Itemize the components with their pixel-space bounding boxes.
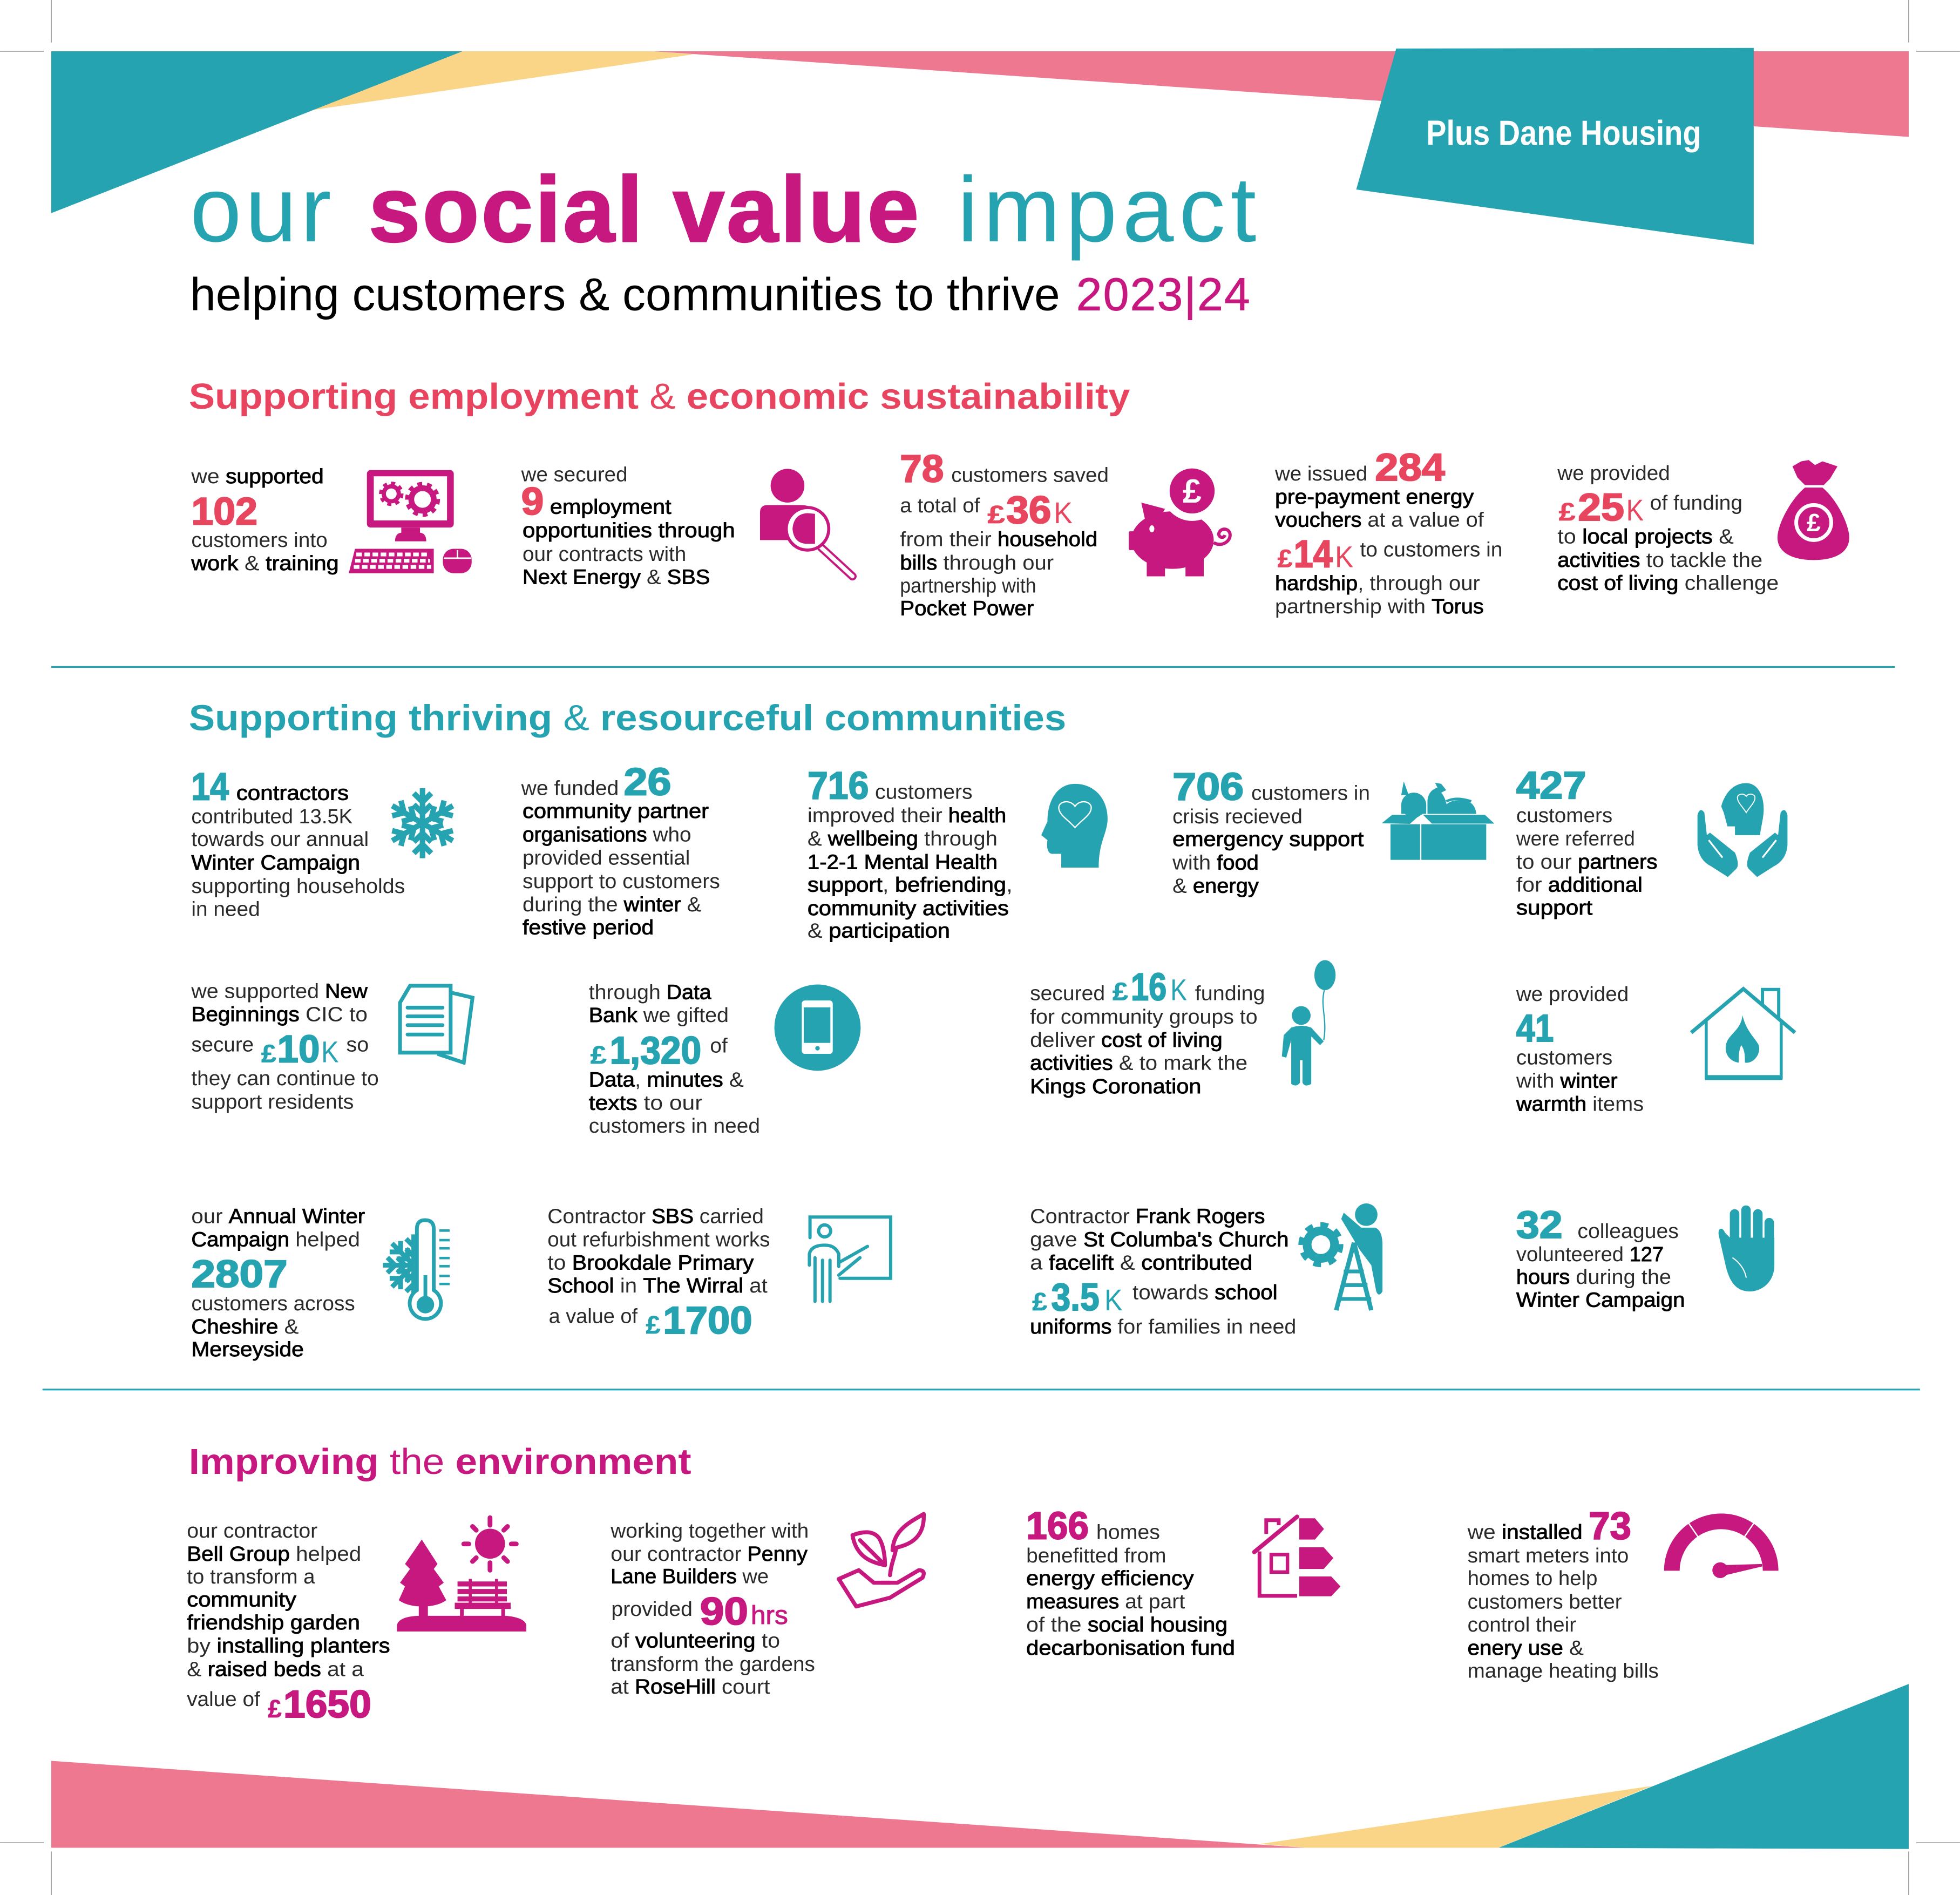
text block: from their household bbox=[900, 529, 1097, 551]
text block: Cheshire & bbox=[191, 1316, 299, 1338]
text block bbox=[1274, 446, 1502, 618]
text block: colleagues bbox=[1577, 1220, 1679, 1243]
icon: raised hand bbox=[1719, 1210, 1774, 1291]
text block: Winter Campaign bbox=[191, 852, 360, 875]
text block: customers into bbox=[191, 529, 328, 552]
icon: worker with gear and ladder bbox=[1301, 1203, 1382, 1310]
panel: New Beginnings bbox=[191, 980, 472, 1113]
text block: 14 bbox=[1294, 533, 1333, 576]
text block: K bbox=[1170, 973, 1187, 1006]
text block bbox=[1030, 965, 1265, 1098]
text block bbox=[900, 448, 1109, 620]
text block: Kings Coronation bbox=[1030, 1075, 1201, 1098]
text block: vouchers at a value of bbox=[1275, 509, 1484, 532]
text block: Lane Builders we bbox=[611, 1565, 769, 1588]
text block: Campaign helped bbox=[191, 1229, 360, 1251]
text block: to transform a bbox=[187, 1566, 315, 1588]
text block: provided essential bbox=[523, 847, 690, 869]
panel: local funding bbox=[1557, 460, 1849, 595]
text block bbox=[1026, 1505, 1235, 1660]
text block bbox=[1030, 1206, 1296, 1338]
text block: activities to tackle the bbox=[1557, 549, 1762, 572]
text block: we supported bbox=[191, 465, 324, 488]
panel: colleague volunteers bbox=[1516, 1203, 1774, 1312]
panel: partner referrals bbox=[1516, 764, 1787, 919]
icon: teacher at board bbox=[809, 1217, 891, 1302]
text block bbox=[1516, 764, 1658, 919]
text block: emergency support bbox=[1172, 828, 1364, 851]
text block: at RoseHill court bbox=[611, 1676, 770, 1698]
text block: K bbox=[1626, 493, 1644, 527]
text block: volunteered 127 bbox=[1516, 1243, 1664, 1266]
text block: Data , minutes & bbox=[589, 1068, 744, 1091]
text block: we secured bbox=[521, 464, 627, 486]
footer shapes bbox=[51, 1684, 1909, 1849]
text block bbox=[521, 761, 720, 939]
text block: community activities bbox=[808, 897, 1009, 920]
panel: annual winter campaign bbox=[191, 1206, 450, 1361]
text block: we provided bbox=[1516, 983, 1629, 1006]
text block: K bbox=[321, 1035, 339, 1068]
panel: customers into work bbox=[191, 465, 472, 575]
icon: thermometer bbox=[383, 1220, 450, 1319]
text block: employment bbox=[550, 496, 672, 519]
icon: house with flame bbox=[1691, 989, 1795, 1080]
text block: smart meters into bbox=[1468, 1545, 1629, 1567]
text block: K bbox=[1104, 1283, 1122, 1317]
icon: search person bbox=[760, 469, 852, 576]
text block: customers saved bbox=[951, 464, 1109, 487]
text block: to local projects & bbox=[1557, 526, 1734, 549]
text block: during the winter & bbox=[523, 894, 701, 916]
text block: of funding bbox=[1650, 492, 1742, 515]
panel: household bills bbox=[900, 448, 1230, 620]
text block: 1-2-1 Mental Health bbox=[808, 851, 998, 874]
text block: 90 bbox=[700, 1590, 748, 1633]
subtitle: 2023|24 bbox=[1076, 268, 1250, 320]
icon: hands holding head bbox=[1698, 783, 1787, 877]
text block: so bbox=[346, 1033, 369, 1056]
divider bbox=[51, 666, 1895, 667]
icon: money bag bbox=[1778, 460, 1849, 560]
text block: we installed bbox=[1467, 1521, 1583, 1544]
text block: support to customers bbox=[523, 870, 720, 893]
text block: to customers in bbox=[1360, 538, 1502, 561]
text block: festive period bbox=[523, 917, 654, 939]
organisation banner bbox=[1356, 48, 1754, 245]
text block: 284 bbox=[1375, 446, 1445, 489]
text block: Contractor SBS carried bbox=[547, 1206, 764, 1228]
text block bbox=[589, 982, 760, 1138]
text block: Bell Group helped bbox=[187, 1543, 361, 1566]
panel: energy efficiency bbox=[1026, 1505, 1340, 1660]
text block: of the social housing bbox=[1026, 1614, 1227, 1636]
text block: 2807 bbox=[191, 1253, 288, 1296]
text block: 36 bbox=[1006, 489, 1051, 532]
icon: phone bbox=[775, 985, 860, 1071]
text block: hours during the bbox=[1516, 1266, 1671, 1289]
text block: funding bbox=[1195, 982, 1265, 1005]
panel: community groups funding bbox=[1030, 960, 1335, 1098]
icon: park scene bbox=[397, 1518, 526, 1632]
text block: customers better bbox=[1468, 1591, 1622, 1613]
text block: Next Energy & SBS bbox=[523, 566, 710, 588]
text block: contractors bbox=[236, 782, 349, 805]
text block: our contractor Penny bbox=[611, 1543, 808, 1566]
text block: hardship , through our bbox=[1275, 572, 1480, 595]
text block: for community groups to bbox=[1030, 1006, 1258, 1028]
text block: 1650 bbox=[283, 1683, 371, 1726]
text block: a total of bbox=[900, 495, 980, 517]
text block: 26 bbox=[624, 761, 672, 804]
divider bbox=[43, 1389, 1920, 1390]
icon: piggy bank bbox=[1129, 461, 1230, 576]
text block: 41 bbox=[1516, 1007, 1554, 1050]
text block: partnership with bbox=[900, 575, 1036, 598]
panel: mental health bbox=[808, 764, 1108, 943]
text block: enery use & bbox=[1468, 1637, 1584, 1660]
icon: piggy bank: £ bbox=[1183, 472, 1202, 510]
text block bbox=[187, 1520, 390, 1726]
text block: 25 bbox=[1578, 486, 1624, 529]
text block: customers across bbox=[191, 1292, 355, 1315]
text block: work & training bbox=[191, 552, 339, 575]
text block: we issued bbox=[1274, 463, 1367, 485]
text block: our contractor bbox=[187, 1520, 318, 1542]
panel: data bank bbox=[589, 982, 860, 1138]
text block: contributed 13.5K bbox=[191, 806, 352, 828]
text block: Merseyside bbox=[191, 1338, 304, 1361]
panel: energy vouchers bbox=[1274, 446, 1502, 618]
text block: customers bbox=[1516, 1047, 1612, 1070]
text block: support bbox=[1516, 897, 1593, 919]
text block: for additional bbox=[1516, 874, 1643, 897]
text block: £ bbox=[591, 1041, 607, 1069]
text block: with winter bbox=[1516, 1070, 1618, 1093]
text block: 78 bbox=[900, 448, 944, 491]
text block: 14 bbox=[191, 766, 229, 809]
text block: were referred bbox=[1516, 828, 1635, 850]
text block: a value of bbox=[549, 1305, 637, 1328]
text block bbox=[191, 465, 339, 575]
text block: & raised beds at a bbox=[187, 1658, 364, 1681]
text block: texts to our bbox=[589, 1092, 703, 1115]
heading: employment: Supporting employment & economic sustainability bbox=[189, 376, 1130, 417]
text block: 3.5 bbox=[1051, 1276, 1100, 1319]
text block: working together with bbox=[610, 1520, 809, 1542]
text block: they can continue to bbox=[191, 1067, 379, 1090]
text block: transform the gardens bbox=[611, 1653, 815, 1676]
text block: Beginnings CIC to bbox=[191, 1004, 368, 1026]
text block: a facelift & contributed bbox=[1030, 1252, 1252, 1275]
text block: £ bbox=[1559, 498, 1576, 526]
text block bbox=[1467, 1505, 1659, 1683]
text block: organisations who bbox=[523, 823, 691, 846]
text block: community partner bbox=[523, 800, 709, 823]
icon: smart meter gauge bbox=[1672, 1521, 1771, 1578]
text block: & wellbeing through bbox=[808, 828, 998, 850]
text block: K bbox=[1335, 540, 1353, 574]
text block: towards our annual bbox=[191, 828, 369, 851]
icon: computer bbox=[349, 470, 472, 573]
panel: employment opportunities bbox=[521, 464, 852, 588]
text block: manage heating bills bbox=[1468, 1660, 1659, 1683]
text block: K bbox=[1054, 496, 1073, 530]
text block bbox=[1516, 1203, 1685, 1312]
text block: warmth items bbox=[1516, 1093, 1644, 1116]
text block: £ bbox=[1113, 977, 1128, 1005]
title: our bbox=[190, 158, 331, 261]
text block: crisis recieved bbox=[1172, 806, 1303, 828]
text block: to Brookdale Primary bbox=[547, 1252, 754, 1275]
text block bbox=[1516, 983, 1644, 1116]
text block: pre-payment energy bbox=[1275, 486, 1474, 509]
text block: & participation bbox=[808, 920, 950, 943]
text block: 1,320 bbox=[610, 1029, 701, 1072]
text block: 102 bbox=[191, 490, 257, 533]
text block: secured bbox=[1030, 982, 1105, 1005]
text block: support residents bbox=[191, 1091, 354, 1113]
text block: 166 bbox=[1026, 1505, 1089, 1548]
text block: opportunities through bbox=[523, 519, 735, 542]
text block: uniforms for families in need bbox=[1030, 1316, 1296, 1338]
text block: Contractor Frank Rogers bbox=[1030, 1206, 1265, 1228]
text block: benefitted from bbox=[1026, 1545, 1166, 1567]
text block: measures at part bbox=[1026, 1591, 1185, 1613]
text block: homes to help bbox=[1468, 1567, 1597, 1590]
text block: School in The Wirral at bbox=[547, 1275, 768, 1297]
icon: child with balloon bbox=[1282, 960, 1335, 1086]
text block: hrs bbox=[751, 1601, 788, 1630]
text block: £ bbox=[268, 1695, 282, 1723]
text block: in need bbox=[191, 898, 260, 921]
text block: value of bbox=[187, 1688, 260, 1711]
text block bbox=[1557, 462, 1779, 595]
text block: by installing planters bbox=[187, 1635, 390, 1657]
title bbox=[190, 158, 1256, 261]
text block: of volunteering to bbox=[611, 1630, 780, 1653]
icon: plant in hand bbox=[839, 1514, 924, 1607]
text block: our Annual Winter bbox=[191, 1206, 365, 1228]
text block: 16 bbox=[1131, 965, 1166, 1009]
text block: customers in need bbox=[589, 1115, 760, 1138]
panel: friendship garden bbox=[187, 1518, 526, 1726]
text block: secure bbox=[191, 1033, 254, 1056]
text block: bills through our bbox=[900, 552, 1054, 574]
text block bbox=[610, 1520, 815, 1698]
icon: food box bbox=[1382, 781, 1494, 860]
text block: support , befriending , bbox=[808, 874, 1013, 896]
text block: gave St Columba's Church bbox=[1030, 1229, 1288, 1251]
panel: SBS school works bbox=[547, 1206, 891, 1342]
text block: improved their health bbox=[808, 804, 1006, 827]
text block bbox=[808, 764, 1013, 943]
icon: money bag: £ bbox=[1807, 509, 1821, 537]
text block: decarbonisation fund bbox=[1026, 1637, 1235, 1660]
heading: environment: Improving the environment bbox=[189, 1441, 691, 1482]
text block bbox=[191, 980, 379, 1113]
text block: cost of living challenge bbox=[1557, 572, 1779, 595]
text block: friendship garden bbox=[187, 1612, 360, 1634]
icon: documents bbox=[400, 986, 472, 1062]
text block: activities & to mark the bbox=[1030, 1052, 1247, 1075]
text block: £ bbox=[646, 1311, 661, 1339]
text block: customers bbox=[1516, 804, 1612, 827]
icon: snowflake bbox=[388, 788, 457, 858]
text block bbox=[191, 1206, 365, 1361]
text block: 706 bbox=[1172, 766, 1244, 809]
panel: smart meters bbox=[1467, 1505, 1771, 1683]
text block: we funded bbox=[521, 777, 619, 800]
text block: we provided bbox=[1557, 462, 1670, 485]
text block: homes bbox=[1096, 1521, 1160, 1544]
text block: of bbox=[710, 1035, 728, 1058]
text block: 9 bbox=[521, 480, 544, 523]
text block bbox=[1172, 766, 1370, 897]
text block: with food bbox=[1172, 852, 1259, 875]
text block: £ bbox=[1032, 1288, 1047, 1316]
text block: 32 bbox=[1516, 1203, 1563, 1247]
text block: supporting households bbox=[191, 875, 405, 898]
text block: customers bbox=[875, 781, 973, 804]
text block: control their bbox=[1468, 1614, 1576, 1636]
text block: energy efficiency bbox=[1026, 1567, 1193, 1590]
panel: winter warmth bbox=[1516, 983, 1795, 1116]
text block: we supported New bbox=[191, 980, 368, 1003]
text block: £ bbox=[261, 1039, 276, 1067]
text block: Winter Campaign bbox=[1516, 1289, 1685, 1312]
panel: crisis support bbox=[1172, 766, 1494, 897]
text block bbox=[191, 766, 405, 921]
panel: community partners bbox=[521, 761, 720, 939]
icon: house with energy rating bbox=[1254, 1517, 1340, 1596]
text block: to our partners bbox=[1516, 851, 1658, 874]
panel: Frank Rogers church bbox=[1030, 1203, 1382, 1338]
panel: Penny Lane volunteering bbox=[610, 1514, 924, 1698]
text block bbox=[547, 1206, 770, 1342]
header banner shapes bbox=[51, 51, 1909, 213]
text block: customers in bbox=[1251, 782, 1370, 805]
text block: deliver cost of living bbox=[1030, 1029, 1223, 1052]
text block: community bbox=[187, 1589, 296, 1612]
text block: our contracts with bbox=[523, 543, 686, 566]
icon: head with heart bbox=[1041, 784, 1108, 868]
text block: towards school bbox=[1132, 1282, 1278, 1304]
title: social value bbox=[369, 158, 919, 261]
text block: £ bbox=[1278, 545, 1293, 573]
text block: provided bbox=[611, 1598, 693, 1621]
text block: through Data bbox=[589, 982, 712, 1004]
text block: & energy bbox=[1172, 875, 1259, 897]
text block: 427 bbox=[1516, 764, 1586, 807]
text block: Pocket Power bbox=[900, 597, 1034, 620]
text block: 73 bbox=[1589, 1505, 1631, 1548]
text block: 1700 bbox=[663, 1299, 752, 1342]
subtitle: helping customers & communities to thrive bbox=[190, 268, 1060, 320]
organisation banner: Plus Dane Housing bbox=[1426, 113, 1701, 153]
text block: partnership with Torus bbox=[1275, 595, 1484, 618]
text block: out refurbishment works bbox=[547, 1229, 770, 1251]
text block: 10 bbox=[277, 1027, 320, 1071]
title: impact bbox=[958, 158, 1256, 261]
text block: Bank we gifted bbox=[589, 1004, 729, 1027]
text block bbox=[521, 464, 735, 588]
text block: 716 bbox=[808, 764, 869, 808]
panel: winter campaign contractors bbox=[191, 766, 457, 921]
heading: communities: Supporting thriving & resourceful communities bbox=[189, 698, 1066, 738]
text block: £ bbox=[987, 500, 1005, 529]
